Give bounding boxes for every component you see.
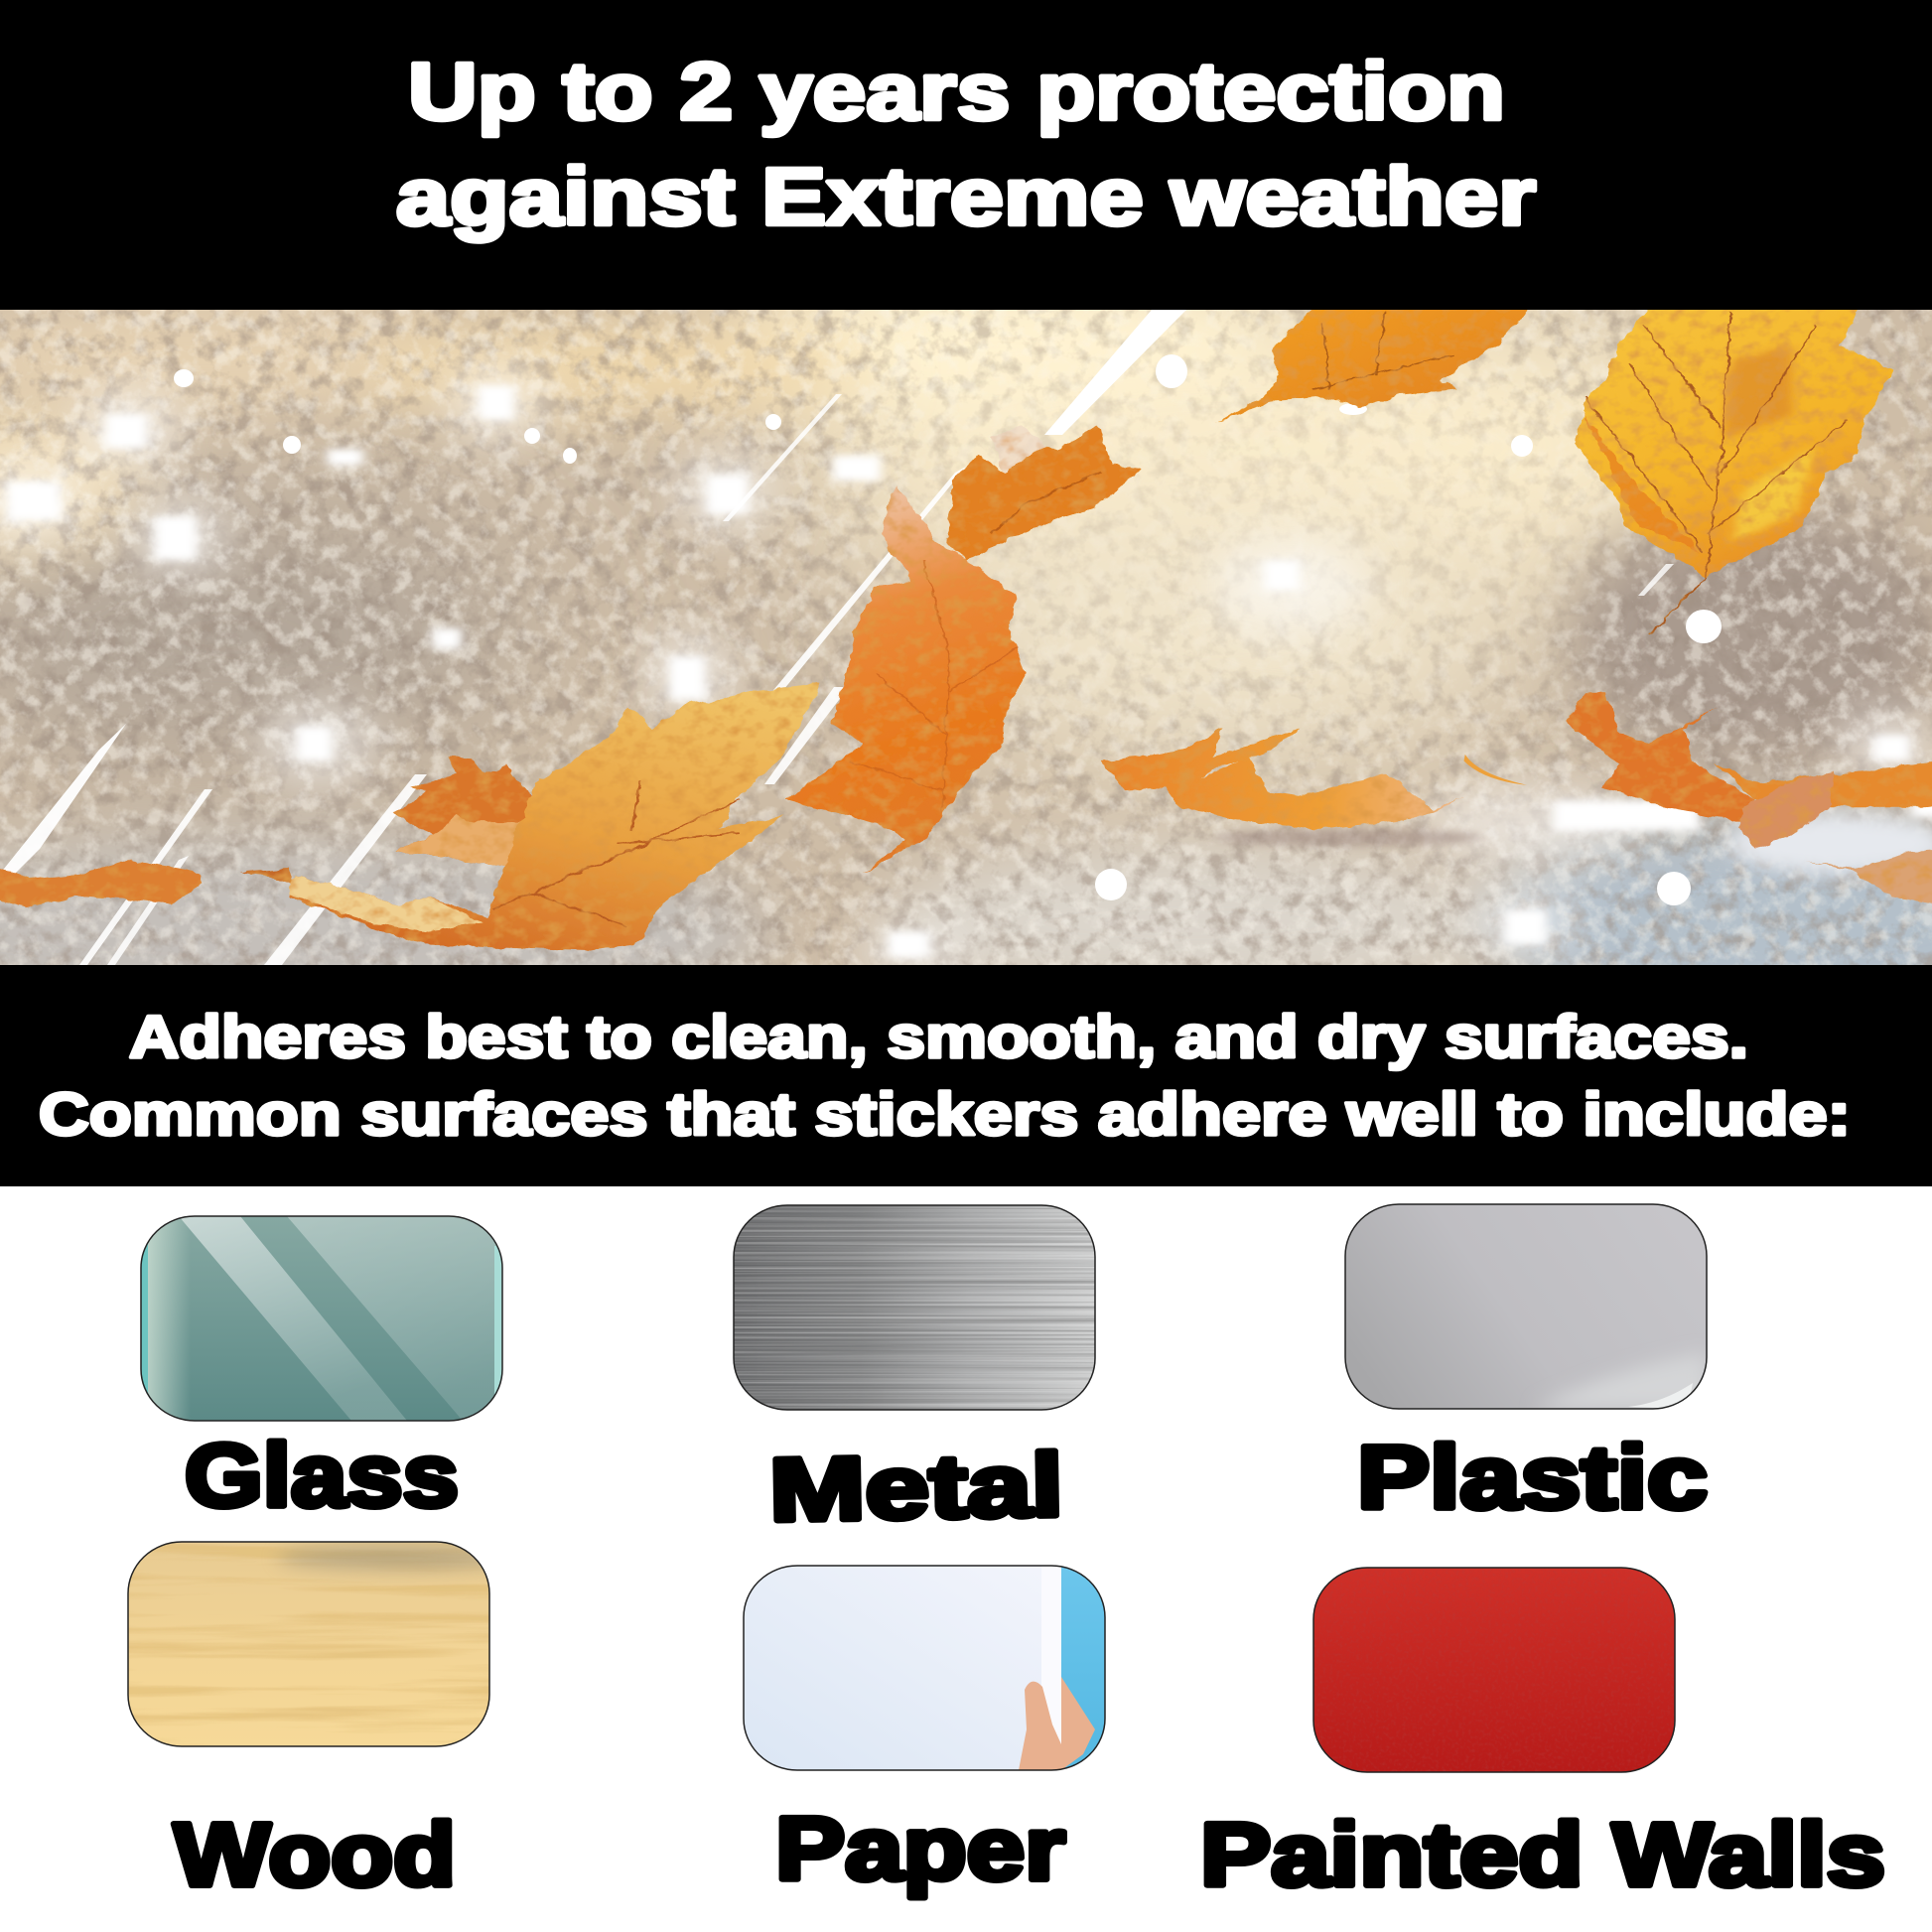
leaf: orange top centre-right xyxy=(1215,307,1530,422)
black subheading band xyxy=(0,965,1932,1186)
rain streaks xyxy=(0,310,1674,965)
label: glass: Glass xyxy=(185,1427,459,1526)
label: paper: Paper xyxy=(775,1800,1065,1899)
subheading text xyxy=(39,1004,1851,1148)
leaf: flat orange lower centre-right with shadow xyxy=(1102,728,1527,846)
title: against Extreme weather xyxy=(396,152,1536,242)
photo banner: autumn leaves blowing over gravel xyxy=(0,310,1932,965)
bright round snow dots xyxy=(174,354,1722,905)
subheading text: Common surfaces that stickers adhere well to include: xyxy=(39,1081,1851,1148)
title xyxy=(396,47,1536,242)
leaf cluster: lower right xyxy=(1567,693,1932,907)
label: metal: Metal xyxy=(768,1436,1064,1541)
swatch: glass xyxy=(141,1216,502,1421)
title: Up to 2 years protection xyxy=(408,47,1505,137)
swatch: wood xyxy=(128,1542,515,1746)
haze halos xyxy=(0,362,1932,977)
swatch: plastic xyxy=(1345,1204,1707,1409)
leaf: big orange centre xyxy=(785,485,1025,873)
leaf: small orange behind lower left xyxy=(394,757,536,866)
swatch: paper with hand xyxy=(744,1566,1105,1770)
leaf: small orange centre top xyxy=(947,425,1142,560)
leaf: ribbon at far left edge xyxy=(0,860,297,907)
subheading text: Adheres best to clean, smooth, and dry surfaces. xyxy=(129,1004,1748,1070)
leaf: large yellow top right xyxy=(1576,307,1893,634)
gravel texture xyxy=(0,310,1932,965)
label: wood: Wood xyxy=(174,1806,456,1905)
label: plastic: Plastic xyxy=(1357,1429,1708,1528)
swatch: painted walls xyxy=(1313,1568,1675,1772)
leaf: large tan-orange lower left xyxy=(290,682,823,951)
label: painted walls: Painted Walls xyxy=(1200,1806,1885,1905)
blue-white haze patch xyxy=(1727,814,1932,874)
icon: hand holding paper xyxy=(1019,1677,1095,1770)
swatch: metal xyxy=(734,1205,1095,1410)
top black header band xyxy=(0,0,1932,310)
glow bokeh xyxy=(6,385,1932,958)
